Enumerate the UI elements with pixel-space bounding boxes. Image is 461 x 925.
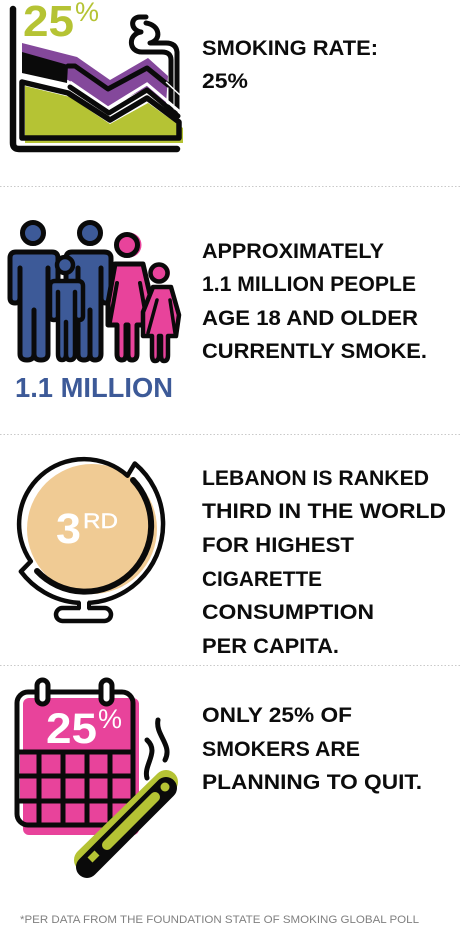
text: smoking rate bbox=[202, 36, 378, 93]
icon: area chart with smoke bbox=[13, 9, 183, 149]
figure: woman bbox=[108, 232, 152, 360]
figure: girl bbox=[143, 263, 179, 361]
text: people who smoke: APPROXIMATELY bbox=[202, 239, 384, 263]
text: smoking rate: 25% bbox=[202, 69, 248, 93]
text: people who smoke: CURRENTLY SMOKE. bbox=[202, 339, 427, 363]
text: ranked third: THIRD IN THE WORLD bbox=[202, 499, 446, 523]
icon: family group bbox=[10, 222, 179, 361]
text: ranked third: CIGARETTE bbox=[202, 567, 322, 591]
figure: boy bbox=[50, 257, 83, 360]
text: smoking rate: SMOKING RATE: bbox=[202, 36, 378, 60]
panel: 1.1 million people bbox=[10, 222, 427, 403]
text: ranked third: PER CAPITA. bbox=[202, 634, 339, 658]
text: ranked third: CONSUMPTION bbox=[202, 600, 374, 624]
label: 3rd: RD bbox=[83, 510, 118, 533]
text: ranked third bbox=[202, 466, 446, 658]
text: planning to quit: SMOKERS ARE bbox=[202, 737, 360, 761]
text: people who smoke: AGE 18 AND OLDER bbox=[202, 306, 418, 330]
big figure: 1.1 million: 1.1 MILLION bbox=[15, 372, 173, 403]
panel: smoking rate bbox=[13, 0, 378, 149]
figure: man right bbox=[66, 222, 111, 360]
label: 3rd: 3 bbox=[56, 505, 81, 553]
figure: man left bbox=[10, 222, 58, 360]
icon: cigarette with smoke bbox=[86, 720, 170, 867]
text: ranked third: LEBANON IS RANKED bbox=[202, 466, 429, 490]
panel: planning to quit bbox=[17, 680, 422, 867]
text: planning to quit bbox=[202, 703, 422, 794]
icon: calendar bbox=[17, 680, 139, 835]
text: ranked third: FOR HIGHEST bbox=[202, 533, 354, 557]
panel: ranked third bbox=[19, 459, 446, 658]
icon: globe bbox=[19, 459, 163, 621]
label: 25%: % bbox=[98, 704, 122, 734]
label: 25%: 25 bbox=[46, 705, 97, 753]
text: people who smoke: 1.1 MILLION PEOPLE bbox=[202, 272, 416, 296]
text: people who smoke bbox=[202, 239, 427, 363]
text: planning to quit: ONLY 25% OF bbox=[202, 703, 352, 727]
text: planning to quit: PLANNING TO QUIT. bbox=[202, 770, 422, 794]
